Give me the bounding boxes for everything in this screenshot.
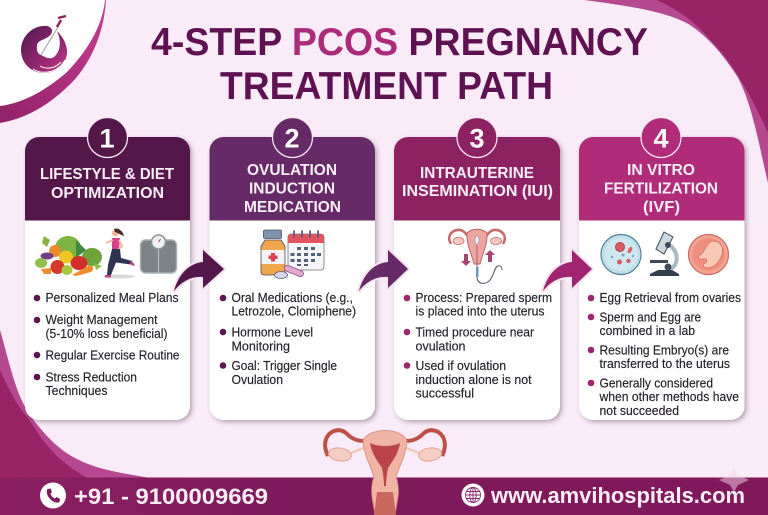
step 1 list: Personalized Meal Plans	[46, 291, 178, 305]
arrow: step 3 to 4	[543, 250, 592, 291]
heading 1: LIFESTYLE & DIET	[40, 166, 175, 183]
step 4 list: not succeeded	[600, 404, 679, 418]
heading 4: FERTILIZATION	[604, 180, 718, 198]
heading 4: (IVF)	[643, 199, 680, 216]
step 2 list: Monitoring	[232, 340, 290, 354]
website: www.amvihospitals.com	[490, 483, 745, 508]
step 2 list: Ovulation	[232, 373, 283, 387]
badge 2	[272, 118, 312, 158]
step 4 list	[588, 291, 741, 418]
panel: step 2	[210, 118, 375, 420]
badge 4: 4	[653, 124, 669, 154]
icon: uterus with catheter	[449, 229, 505, 283]
heading 2: INDUCTION	[249, 180, 335, 198]
bottom-left wave	[0, 330, 150, 478]
step 1 list: (5-10% loss beneficial)	[46, 327, 168, 341]
logo mark	[21, 16, 67, 73]
badge 4	[641, 118, 681, 158]
heading 1: OPTIMIZATION	[51, 185, 164, 202]
icon: globe	[462, 484, 484, 506]
icon: microscope	[650, 232, 679, 276]
heading 2: MEDICATION	[244, 199, 341, 216]
arrow: step 2 to 3	[359, 250, 408, 291]
step 4 list: Generally considered	[600, 376, 713, 390]
step 4 list: Sperm and Egg are	[600, 310, 701, 324]
top-right wave	[584, 0, 768, 183]
step 4 list: Resulting Embryo(s) are	[600, 344, 729, 358]
arrow: step 1 to 2	[174, 250, 224, 291]
heading 3	[402, 165, 553, 200]
heading 2: OVULATION	[247, 162, 337, 179]
panel: step 3	[394, 118, 560, 420]
icon: vegetables	[35, 236, 102, 276]
phone number: +91 - 9100009669	[74, 484, 268, 509]
step 1 list: Stress Reduction	[46, 370, 137, 384]
title: 4-STEP PCOS PREGNANCY	[151, 21, 648, 64]
step 2 list: Letrozole, Clomiphene)	[232, 304, 356, 318]
step 2 list: Goal: Trigger Single	[232, 359, 337, 373]
badge 3: 3	[469, 124, 485, 154]
step 1 header	[25, 137, 190, 220]
step 3 list: Used if ovulation	[416, 359, 506, 373]
icon: runner	[103, 228, 135, 278]
icon: embryo	[688, 234, 728, 274]
step 2 list: Oral Medications (e.g.,	[232, 291, 353, 305]
icon: weighing scale	[140, 235, 176, 273]
step 4 list: when other methods have	[599, 390, 739, 404]
heading 4	[604, 162, 718, 216]
logo corner	[0, 0, 106, 123]
step 3 header	[394, 137, 560, 220]
step 3 list: ovulation	[416, 340, 466, 354]
heading 4: IN VITRO	[627, 162, 695, 179]
heading 3: INTRAUTERINE	[420, 165, 534, 182]
step 1 list	[34, 291, 180, 398]
heading 2	[244, 162, 341, 216]
step 3 list: induction alone is not	[416, 373, 532, 387]
sparkle	[719, 468, 749, 492]
badge 1	[88, 118, 128, 158]
step 1 list: Techniques	[46, 384, 108, 398]
heading 1	[40, 166, 175, 202]
title	[151, 21, 648, 108]
step 3 list: successful	[416, 386, 474, 400]
footer bar	[0, 468, 768, 515]
step 3 list: is placed into the uterus	[416, 304, 544, 318]
icon: medicine bottle and calendar	[261, 230, 324, 278]
panel: step 4	[579, 118, 744, 420]
heading 3: INSEMINATION (IUI)	[402, 183, 553, 200]
step 1 list: Weight Management	[46, 313, 158, 327]
step 2 list	[220, 291, 356, 387]
step 2 list: Hormone Level	[232, 326, 313, 340]
icon: uterus illustration	[325, 430, 445, 515]
panel: step 1	[25, 118, 190, 420]
badge 2: 2	[284, 124, 300, 154]
step 3 list	[404, 291, 552, 400]
badge 1: 1	[99, 124, 115, 154]
step 3 list: Timed procedure near	[416, 326, 534, 340]
title: TREATMENT PATH	[220, 65, 553, 108]
icon: petri dish	[601, 234, 641, 274]
step 4 list: combined in a lab	[600, 324, 695, 338]
step 4 list: Egg Retrieval from ovaries	[600, 291, 741, 305]
step 4 list: transferred to the uterus	[600, 357, 730, 371]
step 1 list: Regular Exercise Routine	[46, 348, 180, 362]
step 3 list: Process: Prepared sperm	[416, 291, 552, 305]
badge 3	[457, 118, 497, 158]
step 2 header	[210, 137, 375, 220]
icon: phone	[40, 482, 66, 508]
step 4 header	[579, 137, 744, 220]
